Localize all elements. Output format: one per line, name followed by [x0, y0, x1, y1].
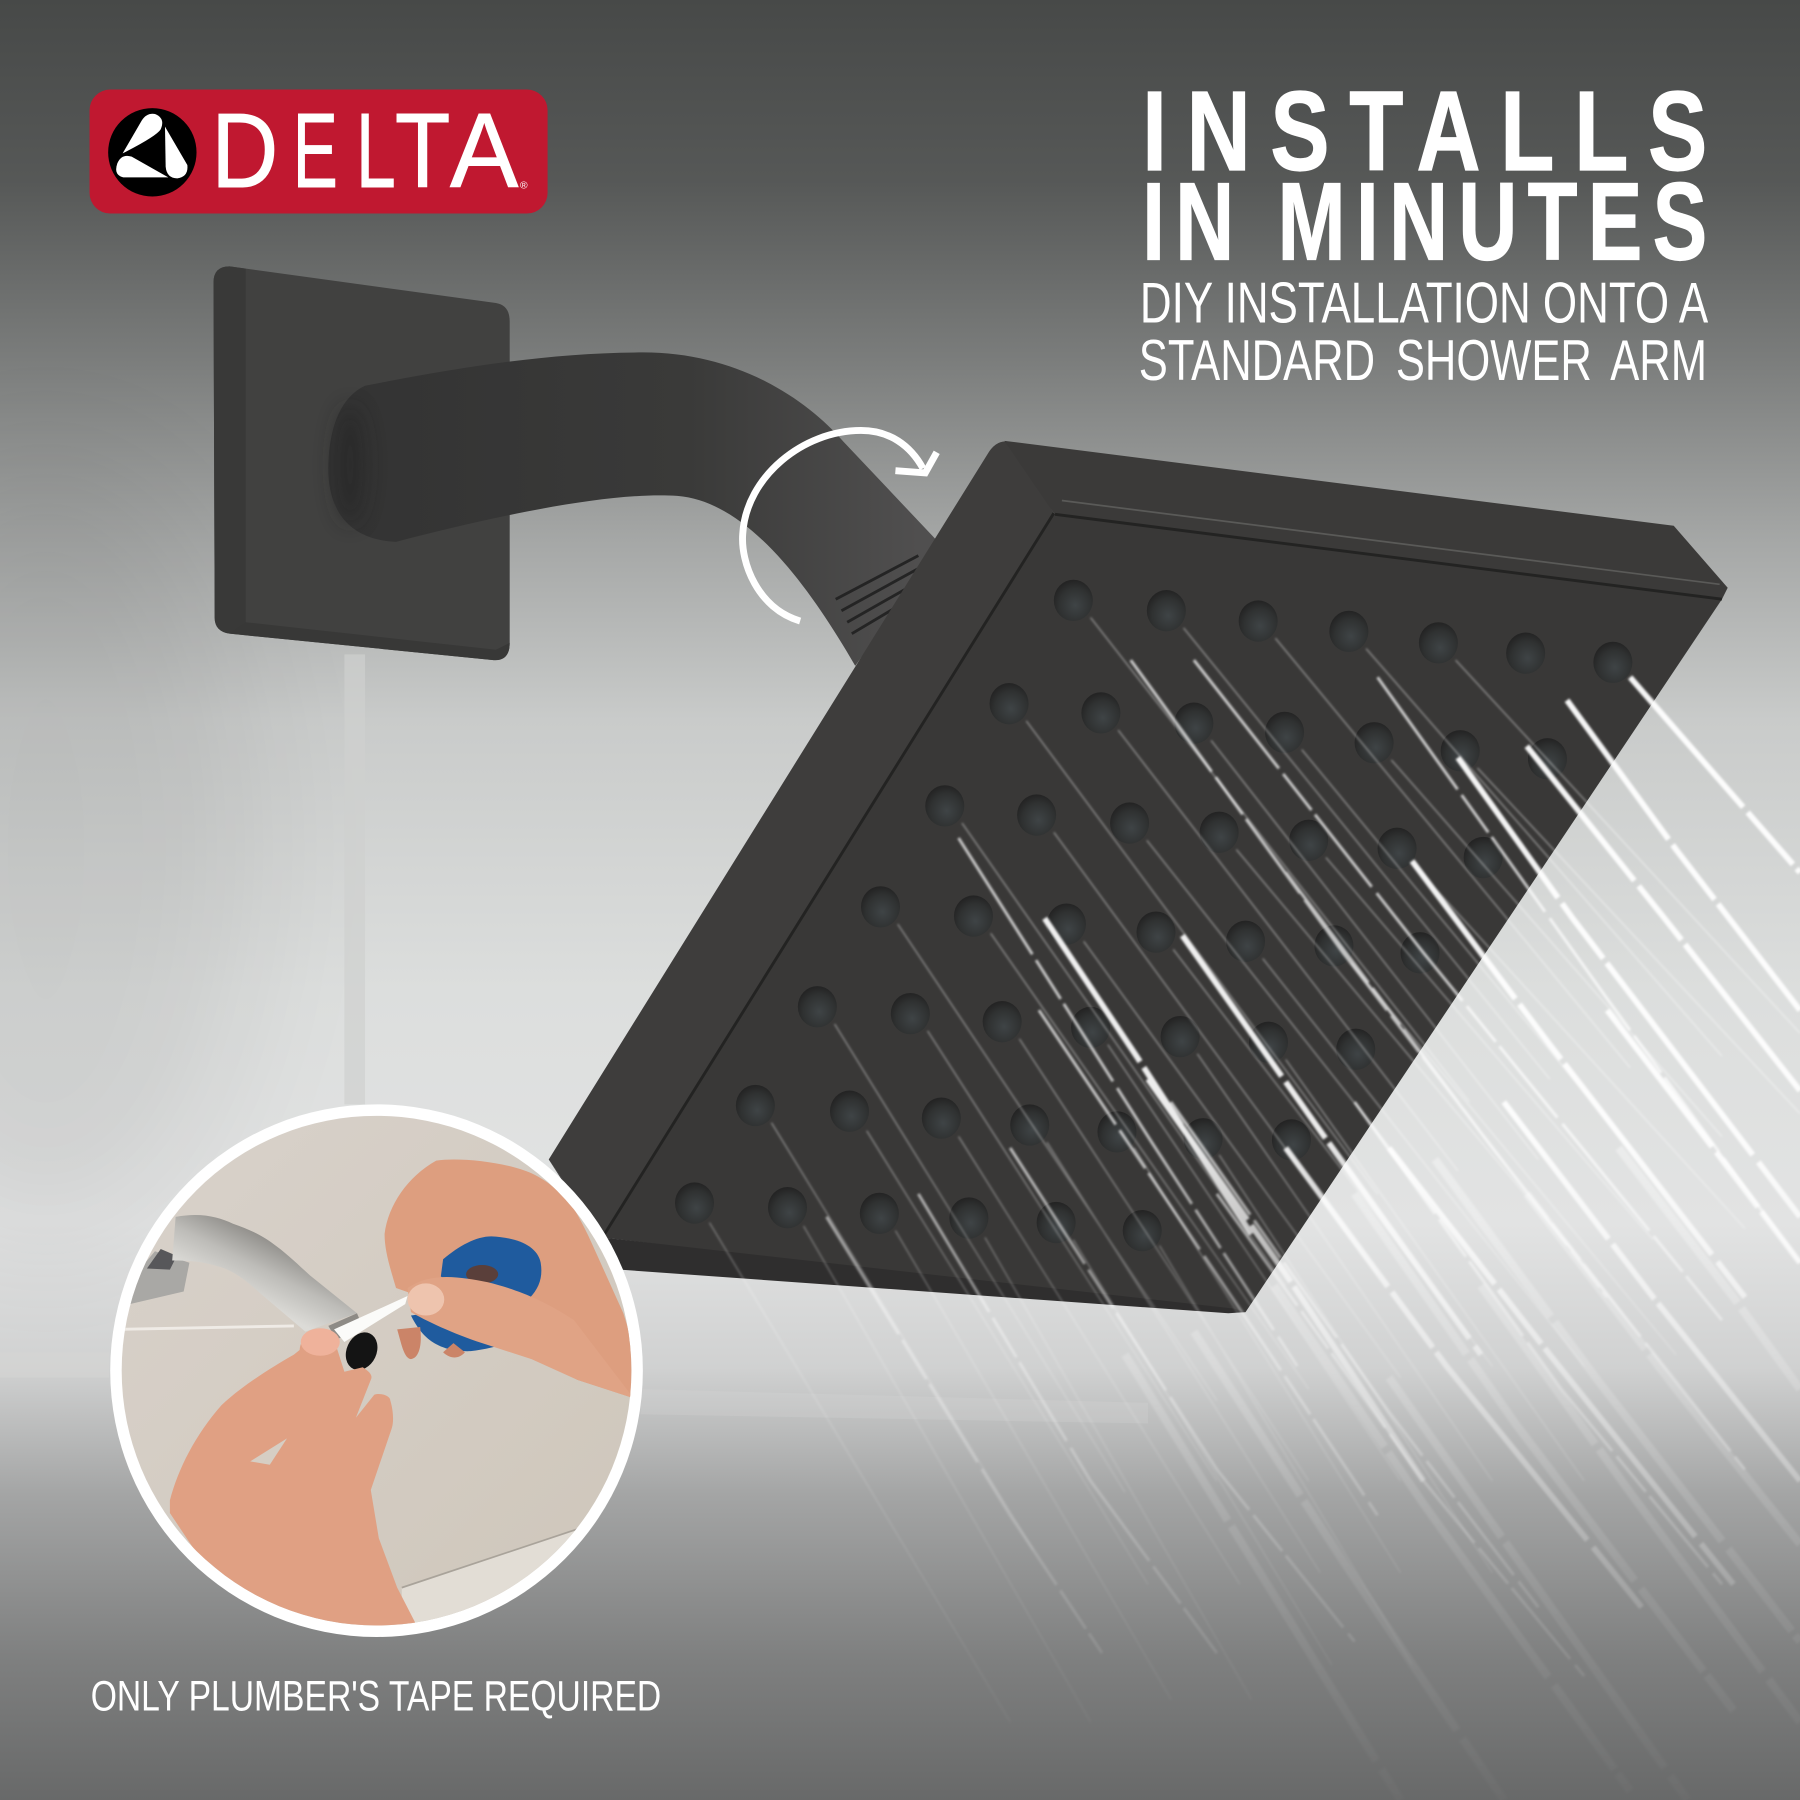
tile seams [122, 1326, 294, 1329]
wordmark: DELTA: L [356, 92, 396, 211]
heading: Installs in Minutes [1142, 67, 1707, 283]
water streams [709, 618, 1800, 1800]
broad spray in lower right [1125, 1148, 1800, 1800]
icon: Delta emblem [108, 108, 197, 197]
rotation arrow [743, 430, 937, 621]
heading: Installs in Minutes: INSTALLS [1142, 67, 1707, 194]
head top bevel [1004, 441, 1728, 599]
head bottom edge [549, 1159, 1246, 1313]
inset photo: applying plumber's tape [110, 1104, 643, 1637]
heading: Installs in Minutes: IN MINUTES [1142, 159, 1707, 283]
blue tape roll lower part [411, 1314, 494, 1352]
left hand [170, 1328, 417, 1626]
wordmark: DELTA: D [211, 93, 278, 210]
wordmark: DELTA: E [293, 92, 338, 210]
shower arm [328, 352, 941, 666]
logo: Delta: ® [520, 180, 528, 191]
head face [603, 513, 1722, 1312]
thin water lines [709, 618, 1800, 1722]
wordmark: DELTA [211, 92, 519, 211]
blue tape roll upper part [441, 1236, 541, 1298]
wordmark: DELTA: T [395, 92, 450, 210]
medium water streaks [827, 660, 1800, 1676]
nozzles grid [675, 580, 1632, 1251]
wall plate [214, 266, 510, 660]
caption: only plumber's tape required: ONLY PLUMBER'S TAPE REQUIRED [91, 1672, 661, 1719]
thumb [408, 1277, 634, 1398]
subheading: DIY installation [1139, 272, 1709, 393]
head left bevel [549, 441, 1054, 1237]
shower head [549, 441, 1728, 1313]
wordmark: DELTA: A [450, 93, 519, 210]
chrome shower arm [130, 1215, 383, 1375]
white tape strip [334, 1296, 408, 1342]
bright water streaks [1045, 677, 1800, 1607]
logo: Delta [90, 90, 548, 214]
right hand [385, 1159, 634, 1398]
